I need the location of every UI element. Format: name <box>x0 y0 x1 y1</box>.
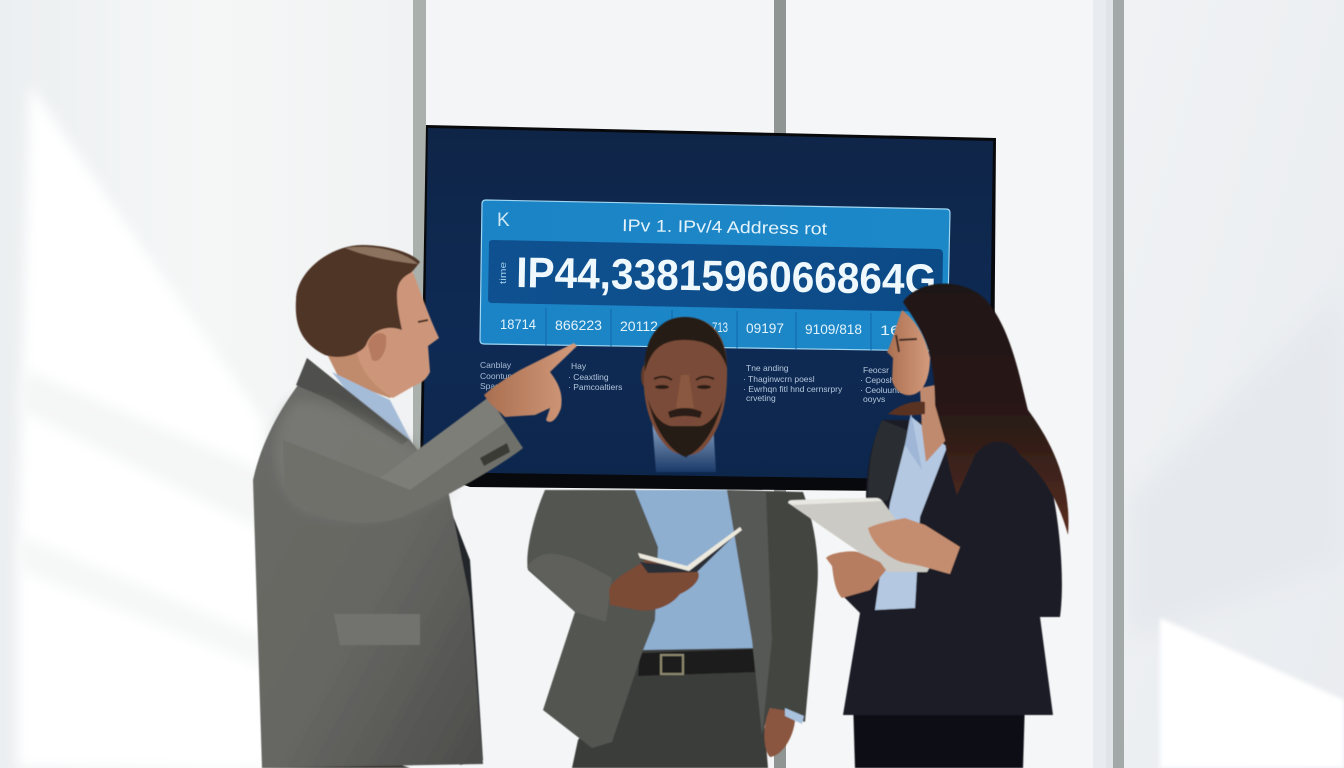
cuff <box>785 708 804 724</box>
screen note column 4: Feocsr <box>863 365 889 375</box>
pointing hand <box>484 343 577 422</box>
ears <box>641 365 649 387</box>
eye <box>418 320 428 322</box>
ear <box>368 333 386 361</box>
panel title: IPv 1. IPv/4 Address rot <box>622 216 828 239</box>
small band label: time <box>498 262 508 284</box>
icon: open notebook <box>638 527 742 573</box>
shirt <box>875 417 947 610</box>
screen note column 3: · Ewrhqn fitl hnd cernsrpry <box>743 384 843 394</box>
jacket body <box>253 358 483 768</box>
screen note column 4 <box>860 365 913 404</box>
sleeve <box>283 397 523 523</box>
blue address panel <box>480 200 950 351</box>
face <box>355 270 439 398</box>
moustache <box>668 408 702 418</box>
address table row: 18714 <box>500 316 536 332</box>
address table row: 16 <box>880 322 900 338</box>
screen note column 2: Hay <box>571 361 587 371</box>
woman presenter <box>788 284 1068 768</box>
beard <box>648 398 723 457</box>
left man presenter <box>253 245 577 768</box>
sleeve buttons <box>480 443 510 466</box>
shirt <box>635 490 758 655</box>
screen note column 1: Canblay <box>480 360 512 370</box>
trousers <box>853 700 1025 768</box>
table dividers <box>546 308 871 351</box>
trousers <box>572 648 768 768</box>
upper hand and wrist <box>868 518 960 574</box>
center man face on screen <box>641 317 727 472</box>
neck <box>325 340 420 398</box>
address table row: 9109/818 <box>805 321 862 337</box>
screen note column 1: Spare <box>480 381 503 391</box>
screen note column 2 <box>568 361 622 392</box>
glasses <box>896 335 917 352</box>
left lapel <box>868 420 912 505</box>
screen note column 2: · Ceaxtling <box>568 372 609 382</box>
screen note column 2: · Pamcoaltiers <box>568 382 622 392</box>
screen note column 3: Tne anding <box>746 363 789 373</box>
trousers <box>264 755 410 768</box>
big address number: IP44,3381596066864G <box>516 249 937 304</box>
eyes <box>655 385 669 389</box>
screen note column 3: · Thaginwcrn poesl <box>743 374 815 384</box>
right hand <box>764 708 795 757</box>
neck <box>920 385 946 462</box>
face <box>887 310 930 395</box>
head <box>644 317 727 455</box>
collar <box>905 412 922 470</box>
address table row: 713 <box>712 319 728 335</box>
screen note column 1: Coontung <box>480 371 517 381</box>
jacket right <box>727 490 818 735</box>
hair cap <box>645 317 727 372</box>
blazer <box>837 420 1062 715</box>
nose <box>676 375 694 408</box>
hair <box>903 284 1068 535</box>
screen note column 4: ooyvs <box>863 394 885 404</box>
collar <box>652 420 716 472</box>
screen note column 4: · Ceoluunter <box>860 385 907 395</box>
icon: tablet <box>788 498 930 572</box>
wall-mounted display screen <box>420 125 996 492</box>
address table row: 09197 <box>746 320 784 336</box>
dark address band <box>488 240 943 312</box>
lower hand <box>826 551 886 598</box>
screen note column 4: · Ceposhcase <box>860 375 913 385</box>
belt <box>638 649 760 676</box>
dark shirt fold <box>445 495 483 765</box>
mouth <box>671 418 699 424</box>
screen note column 1 <box>480 360 517 391</box>
screen note column 3 <box>743 363 843 403</box>
holding hand <box>609 560 699 611</box>
center man body <box>527 490 818 768</box>
lapel pocket <box>334 614 420 645</box>
hair <box>296 245 420 357</box>
address table row: 866223 <box>555 317 602 333</box>
address table row: 20112 <box>620 318 658 334</box>
brows <box>654 377 714 380</box>
shirt collar <box>332 372 412 445</box>
window mullions <box>413 0 426 500</box>
icon: K glyph: K <box>497 210 510 231</box>
jacket left <box>527 490 658 748</box>
hair wisp by neck <box>888 402 925 416</box>
address table row <box>500 316 900 338</box>
screen note column 3: crveting <box>746 393 776 403</box>
